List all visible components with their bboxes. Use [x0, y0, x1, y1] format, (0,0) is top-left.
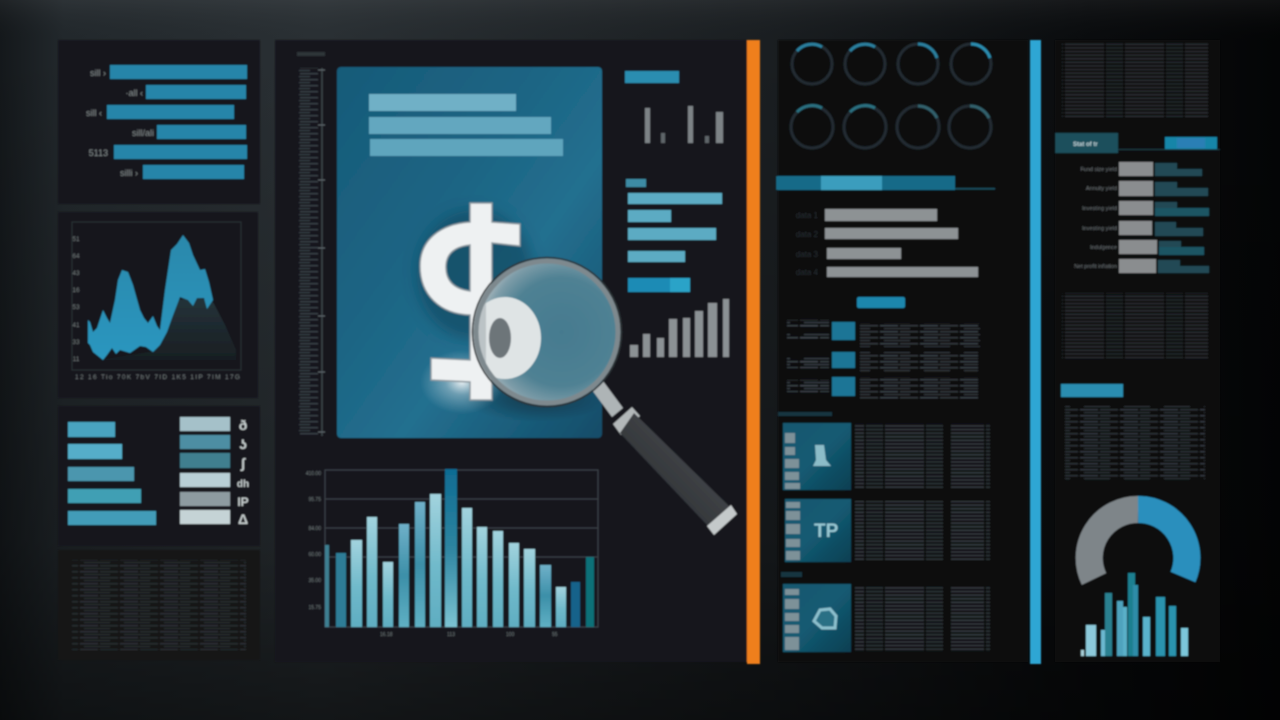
glow	[420, 350, 504, 414]
area: muted back series	[100, 297, 236, 360]
list heading	[626, 179, 646, 187]
grey bar labels: data 4	[796, 268, 819, 277]
panel: horizontal bar list	[58, 40, 260, 204]
blue bars	[68, 422, 156, 525]
tile 2 text	[855, 501, 990, 561]
grey and teal row bars: Indulgence	[1090, 245, 1117, 251]
bottom column chart: 410.00	[306, 471, 321, 477]
bottom column chart: 15.75	[308, 605, 321, 611]
bar labels: 5113	[89, 148, 108, 158]
accent bar: orange	[747, 40, 760, 664]
bottom column chart: 16.18	[380, 632, 393, 638]
panel: right column	[1055, 40, 1220, 662]
handle neck	[592, 381, 623, 417]
grey and teal row bars: Investing yield	[1082, 226, 1117, 232]
button	[1061, 384, 1123, 397]
section heading	[781, 572, 802, 577]
magnified dollar	[469, 297, 541, 379]
swatch icons: dh	[237, 479, 249, 490]
list rows	[787, 320, 980, 399]
button	[857, 297, 905, 308]
panel: text block	[58, 550, 260, 660]
y axis labels: 53	[72, 304, 80, 311]
y axis labels	[72, 236, 80, 363]
bottom column chart: 113	[447, 632, 455, 638]
tag left	[1055, 133, 1118, 153]
bottom column chart: 95.75	[308, 497, 321, 503]
bar labels: ·all ‹	[126, 88, 143, 98]
bottom column chart: 60.00	[308, 552, 321, 558]
x axis labels: 12 16 Tio 70K 7bV 7ID 1K5 1IP 7IM 17G	[75, 374, 240, 381]
tile 1 text	[855, 423, 990, 489]
grey and teal row bars: Fund size yield	[1080, 167, 1117, 173]
grey column chart	[630, 299, 729, 357]
main card	[337, 67, 607, 438]
donut chart	[1089, 509, 1187, 579]
swatch icons: ʃ	[240, 455, 247, 471]
area: blue series	[88, 235, 213, 360]
axis column	[297, 52, 325, 436]
panel: central analysis	[275, 40, 747, 662]
y axis labels: 33	[72, 339, 80, 346]
grey and teal row bars	[1074, 162, 1209, 273]
handle grip	[620, 413, 733, 528]
gauges row 1	[792, 44, 991, 84]
bottom column chart: 35.00	[308, 578, 321, 584]
grey bar labels: data 3	[796, 250, 819, 259]
bottom column chart: 55	[552, 632, 558, 638]
grey bar labels: data 2	[796, 230, 819, 239]
card bars	[369, 94, 563, 156]
section heading	[778, 412, 832, 416]
tile 2	[785, 499, 851, 562]
y axis labels: 41	[72, 322, 80, 329]
bar labels: sill ‹	[86, 108, 102, 118]
small bar chart	[1081, 573, 1188, 656]
tile 3	[783, 584, 851, 652]
tile 1	[783, 423, 851, 490]
mini bars top	[645, 106, 723, 143]
handle collar	[613, 407, 640, 435]
swatch icons: ð	[239, 417, 247, 433]
bar labels: sill/ali	[132, 128, 154, 138]
panel: gauges and lists	[776, 40, 1028, 662]
bottom column chart	[306, 469, 598, 638]
bars	[107, 65, 247, 179]
tag right	[1118, 137, 1220, 150]
swatch icons: IP	[237, 495, 249, 509]
handle cap	[707, 505, 737, 535]
y axis labels: 64	[72, 253, 80, 260]
top right label	[625, 71, 679, 83]
swatches	[180, 417, 230, 524]
bar labels: silli ›	[120, 168, 138, 178]
y axis labels: 51	[72, 236, 80, 243]
section header band	[776, 176, 995, 190]
shadow behind dollar	[417, 210, 533, 340]
grey and teal row bars: Annuity yield	[1086, 186, 1117, 192]
text block middle	[1062, 293, 1208, 360]
swatch icons: ʖ	[239, 436, 247, 452]
tile 3 text	[855, 586, 990, 652]
text block lower	[1065, 405, 1205, 481]
y axis labels: 16	[72, 287, 80, 294]
bar labels: sill ›	[90, 68, 106, 78]
lens rim	[476, 261, 618, 403]
grey and teal row bars: Net profit inflation	[1074, 264, 1117, 270]
swatch icons: Δ	[238, 511, 248, 527]
accent bar: blue	[1030, 40, 1041, 664]
grey bar labels: data 1	[796, 211, 819, 220]
text block top	[1062, 42, 1208, 118]
button	[628, 278, 690, 292]
panel: area chart	[58, 212, 258, 398]
bottom column chart: 84.00	[308, 526, 321, 532]
bar labels	[86, 68, 154, 178]
panel: bars and swatches	[58, 406, 260, 546]
grey bar labels	[796, 211, 819, 277]
y axis labels: 43	[72, 270, 80, 277]
y axis labels: 11	[73, 356, 80, 363]
icon: dollar sign	[420, 203, 520, 400]
bottom column chart: 100	[506, 632, 515, 638]
gauges row 2	[791, 106, 991, 148]
lens	[475, 260, 619, 404]
swatch icons	[237, 417, 249, 527]
grey and teal row bars: Investing yield	[1082, 206, 1117, 212]
list bars	[628, 193, 722, 262]
grey bars	[825, 209, 978, 277]
tag left: Stat of tr	[1073, 142, 1098, 148]
icon: magnifying glass	[469, 258, 737, 535]
tile 2: TP	[814, 521, 839, 542]
